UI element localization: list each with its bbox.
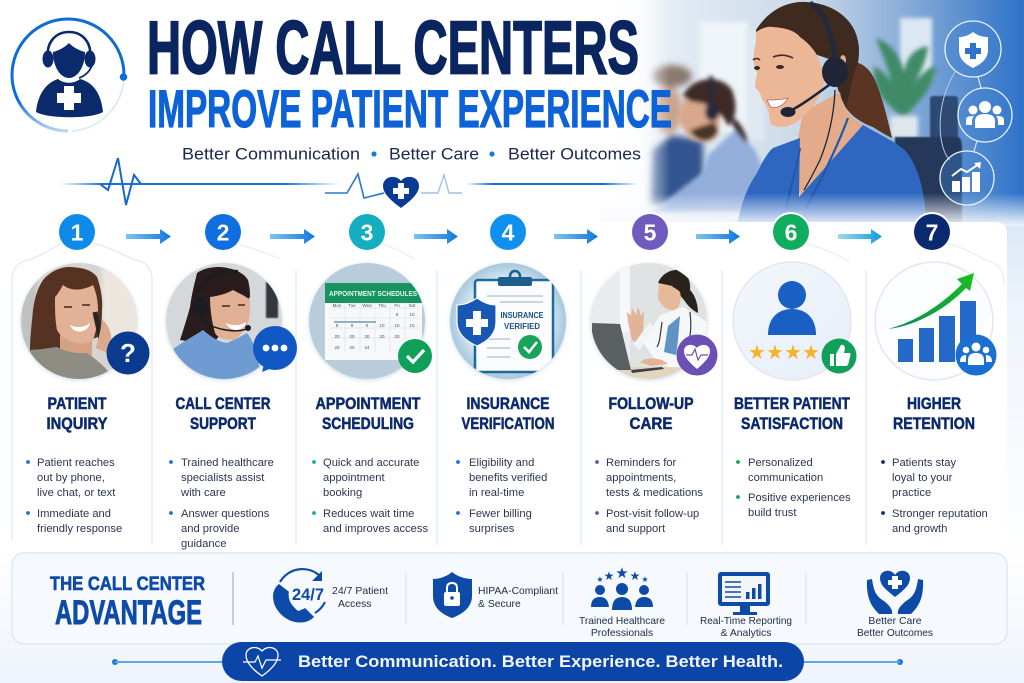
arrow 2 to 3 bbox=[270, 229, 315, 244]
title bbox=[147, 6, 672, 139]
face bbox=[210, 290, 250, 340]
advantage heading: THE CALL CENTER bbox=[50, 574, 205, 595]
plant bbox=[874, 38, 936, 138]
icon: people bbox=[958, 88, 1012, 142]
tagline: Better Care bbox=[389, 144, 479, 164]
image: calendar: 8 bbox=[336, 323, 339, 328]
bullets: live chat, or text bbox=[37, 487, 116, 499]
label: better care bbox=[857, 616, 933, 639]
tagline bbox=[182, 144, 641, 164]
connector line right bbox=[800, 659, 903, 665]
title: HOW CALL CENTERS bbox=[147, 6, 639, 90]
bullets: communication bbox=[748, 472, 823, 484]
hand bbox=[627, 307, 644, 345]
feature circles bbox=[940, 21, 1012, 205]
number 2: 2 bbox=[217, 220, 229, 246]
image: calendar: Thu bbox=[378, 303, 386, 308]
laptop bbox=[592, 323, 631, 370]
stars: ★ bbox=[766, 342, 784, 364]
headset bbox=[198, 272, 238, 292]
bullets bbox=[169, 457, 274, 550]
bullets: guidance bbox=[181, 538, 226, 550]
number 4 bbox=[488, 212, 528, 252]
stars: ★ bbox=[748, 342, 766, 364]
face bbox=[753, 27, 824, 127]
bullets: with care bbox=[180, 487, 226, 499]
arrow 3 to 4 bbox=[414, 229, 458, 244]
arrow 5 to 6 bbox=[696, 229, 740, 244]
bullets: appointments, bbox=[606, 472, 676, 484]
bullets: and support bbox=[606, 523, 666, 535]
label: HIPAA: & Secure bbox=[478, 599, 521, 610]
badge: people bbox=[956, 334, 996, 376]
bullets: Trained healthcare bbox=[181, 457, 274, 469]
headset bbox=[810, 3, 835, 64]
coat bbox=[643, 307, 709, 368]
heading: INSURANCE bbox=[466, 395, 550, 413]
bullets: specialists assist bbox=[181, 472, 265, 484]
bullets: tests & medications bbox=[606, 487, 703, 499]
label: HIPAA bbox=[478, 586, 558, 610]
number 4: 4 bbox=[502, 220, 515, 246]
label: trained professionals: Professionals bbox=[591, 628, 653, 639]
heartbeat line left bbox=[60, 158, 340, 205]
heading bbox=[176, 395, 271, 433]
image: person with star rating bbox=[733, 262, 851, 380]
image: calendar: 20 bbox=[334, 334, 340, 339]
icon: 24/7 phone bbox=[274, 569, 325, 622]
step 6: better patient satisfaction bbox=[733, 262, 856, 519]
step 4: insurance verification bbox=[450, 263, 566, 535]
smile bbox=[70, 323, 90, 332]
badge: chat dots bbox=[253, 326, 297, 372]
step numbers bbox=[57, 212, 952, 252]
bullets: booking bbox=[323, 487, 362, 499]
bullets: Patient reaches bbox=[37, 457, 115, 469]
bullets: and improves access bbox=[323, 523, 428, 535]
label: 24/7 access: 24/7 Patient bbox=[332, 586, 388, 597]
label: reporting bbox=[700, 616, 792, 639]
image: calendar: 20 bbox=[364, 334, 370, 339]
hair bbox=[180, 267, 250, 345]
bullets bbox=[26, 457, 122, 535]
badge: question mark: ? bbox=[120, 338, 136, 368]
bullets: friendly response bbox=[37, 523, 122, 535]
bullets bbox=[881, 457, 988, 535]
label: better care: Better Outcomes bbox=[857, 628, 933, 639]
bullets bbox=[456, 457, 547, 535]
number 1: 1 bbox=[71, 220, 84, 246]
window in background bbox=[700, 18, 932, 140]
heading: CARE bbox=[630, 415, 672, 433]
heading bbox=[46, 395, 108, 433]
bullets bbox=[312, 457, 428, 535]
bullets: Personalized bbox=[748, 457, 813, 469]
advantage panel bbox=[12, 553, 1007, 644]
label: 24/7 access bbox=[332, 586, 388, 610]
label: reporting: & Analytics bbox=[721, 628, 771, 639]
bullets: Answer questions bbox=[181, 508, 270, 520]
bottom haze on hero bbox=[650, 194, 1024, 226]
bullets: Quick and accurate bbox=[323, 457, 419, 469]
image: calendar: APPOINTMENT SCHEDULES bbox=[329, 289, 417, 298]
left white fade bbox=[620, 0, 668, 213]
bullets: Immediate and bbox=[37, 508, 111, 520]
bullets: build trust bbox=[748, 507, 797, 519]
smile bbox=[226, 322, 246, 330]
image: calendar: 20 bbox=[334, 345, 340, 350]
icon: trained professionals: ★ bbox=[604, 569, 614, 583]
image: calendar: 9 bbox=[351, 323, 354, 328]
eyes and brows bbox=[753, 55, 793, 60]
hero photo: call center agents bbox=[600, 0, 1024, 226]
heading: RETENTION bbox=[893, 415, 975, 433]
number 2 bbox=[203, 212, 243, 252]
shirt bbox=[28, 347, 108, 379]
icon: trained professionals: ★ bbox=[615, 565, 629, 582]
heading: CALL CENTER bbox=[176, 395, 271, 413]
icon: monitor analytics bbox=[718, 572, 770, 615]
image: calendar: Tue bbox=[348, 303, 356, 308]
step 7: higher retention bbox=[875, 262, 996, 535]
face bbox=[658, 284, 681, 310]
blurred colleague back bbox=[650, 65, 704, 205]
bullets: benefits verified bbox=[469, 472, 547, 484]
number 3: 3 bbox=[361, 220, 373, 246]
smile bbox=[767, 98, 788, 108]
arrow 1 to 2 bbox=[126, 229, 171, 244]
heading: FOLLOW-UP bbox=[608, 395, 694, 413]
bullets: Reminders for bbox=[606, 457, 677, 469]
main process panel bbox=[12, 222, 1007, 548]
number 6 bbox=[771, 212, 811, 252]
photo: woman on phone bbox=[20, 262, 140, 382]
image: calendar: 10 bbox=[409, 312, 415, 317]
bullets: Positive experiences bbox=[748, 492, 851, 504]
bullets: Eligibility and bbox=[469, 457, 534, 469]
image: calendar: 20 bbox=[379, 334, 385, 339]
dark chair bbox=[895, 96, 962, 226]
advantage heading bbox=[50, 574, 205, 632]
stars: ★ bbox=[802, 342, 820, 364]
heading bbox=[316, 395, 420, 433]
icon: trained professionals: ★ bbox=[641, 575, 649, 584]
heading: APPOINTMENT bbox=[316, 395, 420, 413]
photo: doctor telehealth bbox=[590, 262, 709, 381]
heading: VERIFICATION bbox=[462, 415, 554, 433]
badge: check bbox=[398, 339, 432, 373]
image: calendar bbox=[309, 262, 427, 380]
label: trained professionals: Trained Healthcare bbox=[579, 616, 665, 627]
arrows between steps bbox=[126, 229, 882, 244]
banner text: Better Communication. Better Experience. Better Health. bbox=[298, 652, 783, 671]
icon: trained professionals: ★ bbox=[596, 575, 604, 584]
image: calendar: 10 bbox=[409, 323, 415, 328]
tagline: Better Communication bbox=[182, 144, 360, 164]
icon: trained professionals bbox=[591, 565, 653, 610]
bullets: and provide bbox=[181, 523, 239, 535]
arrow 4 to 5 bbox=[554, 229, 598, 244]
chart: growth bars with arrow bbox=[875, 262, 993, 380]
number 5: 5 bbox=[644, 220, 657, 246]
bullets: practice bbox=[892, 487, 931, 499]
bullets bbox=[595, 457, 703, 535]
icon: hands with heart bbox=[867, 571, 923, 614]
bullets: Stronger reputation bbox=[892, 508, 988, 520]
image: calendar: 20 bbox=[349, 345, 355, 350]
neck and chest bbox=[798, 92, 863, 198]
main agent woman bbox=[737, 2, 927, 226]
heading: INQUIRY bbox=[46, 415, 108, 433]
stars: ★ bbox=[784, 342, 802, 364]
heartbeat line with heart icon bbox=[325, 174, 638, 208]
icon: lock shield bbox=[433, 572, 472, 618]
scrubs bbox=[737, 125, 927, 226]
bullets bbox=[736, 457, 851, 519]
image: calendar: 20 bbox=[394, 334, 400, 339]
bottom banner bbox=[222, 642, 804, 681]
connector bbox=[974, 77, 981, 151]
bullets: out by phone, bbox=[37, 472, 105, 484]
image: calendar: 24 bbox=[364, 345, 370, 350]
bullets: Patients stay bbox=[892, 457, 956, 469]
heading: BETTER PATIENT bbox=[734, 395, 850, 413]
label: reporting: Real-Time Reporting bbox=[700, 616, 792, 627]
image: calendar: 10 bbox=[394, 323, 400, 328]
image: calendar: 10 bbox=[379, 323, 385, 328]
heading: PATIENT bbox=[48, 395, 106, 413]
arrow 6 to 7 bbox=[838, 229, 882, 244]
number 6: 6 bbox=[785, 220, 797, 246]
image: calendar: 8 bbox=[396, 312, 399, 317]
badge: question mark bbox=[106, 332, 150, 374]
blurred colleague front bbox=[650, 76, 762, 213]
bullets: Fewer billing bbox=[469, 508, 532, 520]
neck bbox=[60, 335, 92, 358]
face bbox=[55, 285, 98, 344]
heading bbox=[462, 395, 554, 433]
icon: 24/7 phone: 24/7 bbox=[292, 586, 324, 604]
image: calendar: Sat bbox=[409, 303, 416, 308]
title: IMPROVE PATIENT EXPERIENCE bbox=[148, 80, 672, 139]
hair bbox=[658, 270, 698, 313]
heading: SUPPORT bbox=[190, 415, 256, 433]
heading: HIGHER bbox=[907, 395, 961, 413]
heading bbox=[893, 395, 975, 433]
hair bbox=[30, 267, 102, 352]
lanyard bbox=[786, 118, 848, 208]
step 1: patient inquiry bbox=[20, 262, 150, 535]
label: better care: Better Care bbox=[868, 616, 922, 627]
photo: smiling agent bbox=[165, 262, 283, 382]
number 7: 7 bbox=[926, 220, 938, 246]
bullets: loyal to your bbox=[892, 472, 953, 484]
logo: headset agent icon bbox=[12, 19, 127, 131]
number 1 bbox=[57, 212, 97, 252]
image: calendar: 0 bbox=[366, 323, 369, 328]
hair and ponytail bbox=[756, 2, 892, 138]
heading: SATISFACTION bbox=[741, 415, 843, 433]
icon: growth chart bbox=[940, 151, 994, 205]
label: 24/7 access: Access bbox=[338, 599, 372, 610]
bullets: appointment bbox=[323, 472, 385, 484]
image: calendar: Wed bbox=[362, 303, 372, 308]
bullets: Post-visit follow-up bbox=[606, 508, 699, 520]
icon: heart outline bbox=[243, 648, 281, 676]
label: trained professionals bbox=[579, 616, 665, 639]
step 5: follow-up care bbox=[590, 262, 718, 535]
bullets: and growth bbox=[892, 523, 947, 535]
image: calendar: Mon bbox=[333, 303, 342, 308]
image: insurance clipboard: INSURANCE bbox=[500, 310, 544, 320]
image: calendar: 20 bbox=[349, 334, 355, 339]
heading bbox=[734, 395, 850, 433]
step 2: call center support bbox=[165, 262, 297, 550]
advantage heading: ADVANTAGE bbox=[55, 594, 202, 632]
number 3 bbox=[347, 212, 387, 252]
number 7 bbox=[912, 212, 952, 252]
heading: SCHEDULING bbox=[322, 415, 414, 433]
number 5 bbox=[630, 212, 670, 252]
image: insurance clipboard bbox=[450, 263, 566, 379]
shirt bbox=[173, 330, 260, 379]
icon: trained professionals: ★ bbox=[630, 569, 640, 583]
image: insurance clipboard: VERIFIED bbox=[504, 321, 540, 331]
step 3: appointment scheduling bbox=[309, 262, 432, 535]
tagline: Better Outcomes bbox=[508, 144, 641, 164]
phone and hand bbox=[95, 312, 101, 340]
badge: thumbs up bbox=[822, 338, 856, 374]
label: HIPAA: HIPAA-Compliant bbox=[478, 586, 558, 597]
bullets: surprises bbox=[469, 523, 515, 535]
image: calendar: Fri bbox=[394, 303, 400, 308]
stars bbox=[748, 342, 820, 364]
heading bbox=[608, 395, 694, 433]
icon: shield plus bbox=[945, 21, 1001, 77]
bullets: in real-time bbox=[469, 487, 524, 499]
connector line left bbox=[112, 659, 225, 665]
badge: heart pulse bbox=[676, 334, 718, 376]
bullets: Reduces wait time bbox=[323, 508, 414, 520]
